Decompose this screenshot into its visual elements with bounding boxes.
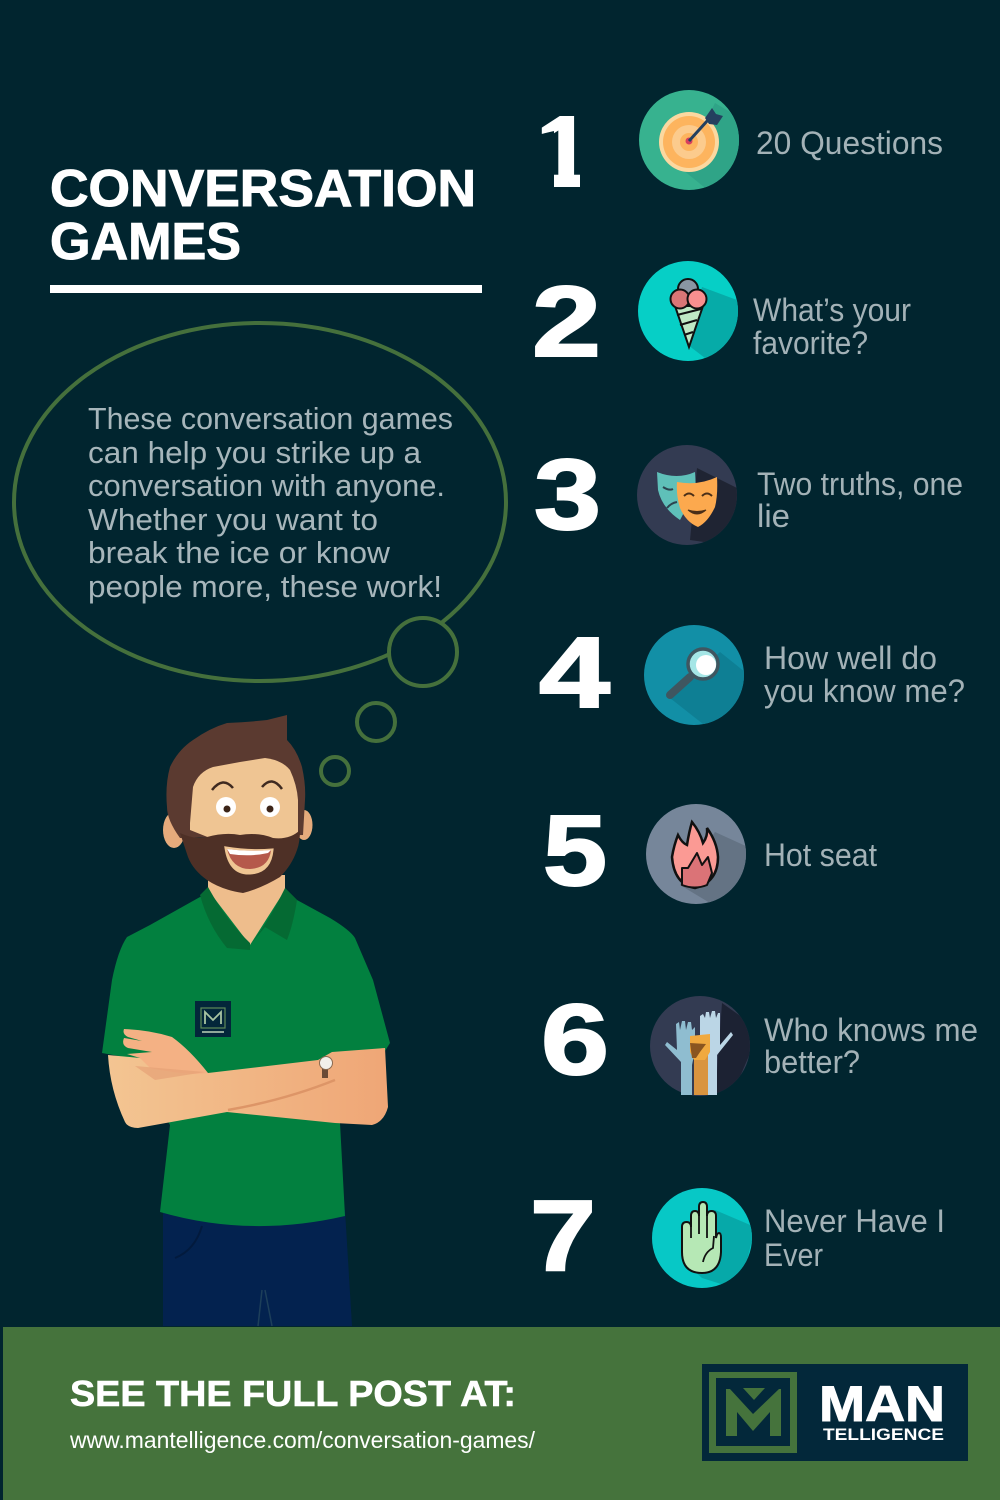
icon: ice cream — [638, 261, 738, 361]
right hand — [700, 1011, 733, 1095]
item 6 — [544, 996, 977, 1096]
mouth — [226, 848, 272, 873]
shirt — [102, 888, 390, 1226]
footer url: www.mantelligence.com/conversation-games/ — [69, 1427, 536, 1453]
footer panel — [3, 1327, 1000, 1500]
bubble text: These conversation games — [88, 401, 453, 436]
beard — [180, 830, 300, 893]
thought circles — [321, 618, 457, 785]
item 1 — [542, 90, 942, 190]
icon: flame — [646, 804, 750, 905]
face — [190, 758, 298, 850]
head — [163, 715, 312, 893]
item 2 — [535, 261, 910, 361]
neck — [208, 875, 285, 945]
label: better? — [764, 1044, 860, 1080]
left hand — [665, 1021, 695, 1095]
label: Two truths, one — [757, 466, 963, 502]
shirt badge — [195, 1001, 231, 1037]
eyebrows — [212, 781, 282, 790]
trousers — [163, 1210, 352, 1326]
label: favorite? — [753, 325, 868, 361]
label: How well do — [764, 640, 937, 676]
label — [764, 640, 965, 709]
icon: target — [639, 90, 739, 190]
bubble text — [88, 401, 453, 604]
number 7: 7 — [530, 1180, 596, 1292]
number 1: 1 — [536, 96, 592, 208]
label — [757, 466, 963, 534]
thought bubble — [14, 323, 506, 785]
logo: TELLIGENCE — [823, 1425, 944, 1444]
bubble outline — [14, 323, 506, 681]
label: Who knows me — [764, 1012, 978, 1048]
watch — [320, 1056, 332, 1078]
number 6: 6 — [541, 984, 609, 1096]
logo — [702, 1364, 968, 1461]
label: 20 Questions — [756, 125, 943, 161]
label — [753, 292, 911, 361]
hair — [166, 715, 305, 838]
icon: hand — [652, 1188, 755, 1290]
icon: theatre masks — [637, 445, 745, 545]
icon: raised hands — [650, 996, 750, 1096]
ears — [163, 812, 185, 848]
collar — [200, 887, 297, 950]
bubble text: break the ice or know — [88, 535, 391, 570]
label: lie — [757, 498, 790, 534]
number 4: 4 — [539, 617, 610, 729]
arms — [108, 1029, 388, 1128]
title: GAMES — [50, 213, 241, 271]
label — [764, 1012, 978, 1080]
man illustration — [102, 715, 390, 1326]
bubble text: people more, these work! — [88, 569, 442, 604]
bubble text: conversation with anyone. — [88, 468, 445, 503]
footer heading: SEE THE FULL POST AT: — [70, 1373, 516, 1414]
item 3 — [535, 445, 962, 545]
title — [50, 160, 476, 271]
label — [764, 1203, 945, 1273]
number 5: 5 — [543, 795, 607, 907]
fist — [694, 1055, 708, 1095]
icon: magnifying glass — [644, 625, 744, 725]
label: you know me? — [764, 673, 965, 709]
item 7 — [534, 1188, 942, 1288]
title: CONVERSATION — [50, 160, 476, 218]
logo: MAN — [819, 1376, 945, 1432]
number 2: 2 — [532, 266, 601, 378]
label: Ever — [764, 1237, 823, 1273]
bubble text: can help you strike up a — [88, 435, 422, 470]
eyes — [216, 797, 280, 817]
number 3: 3 — [534, 439, 601, 551]
item 4 — [540, 625, 964, 725]
label: Never Have I — [764, 1203, 945, 1239]
bubble text: Whether you want to — [88, 502, 378, 537]
item 5 — [545, 804, 877, 904]
label: What’s your — [753, 292, 911, 328]
label: Hot seat — [764, 837, 877, 873]
